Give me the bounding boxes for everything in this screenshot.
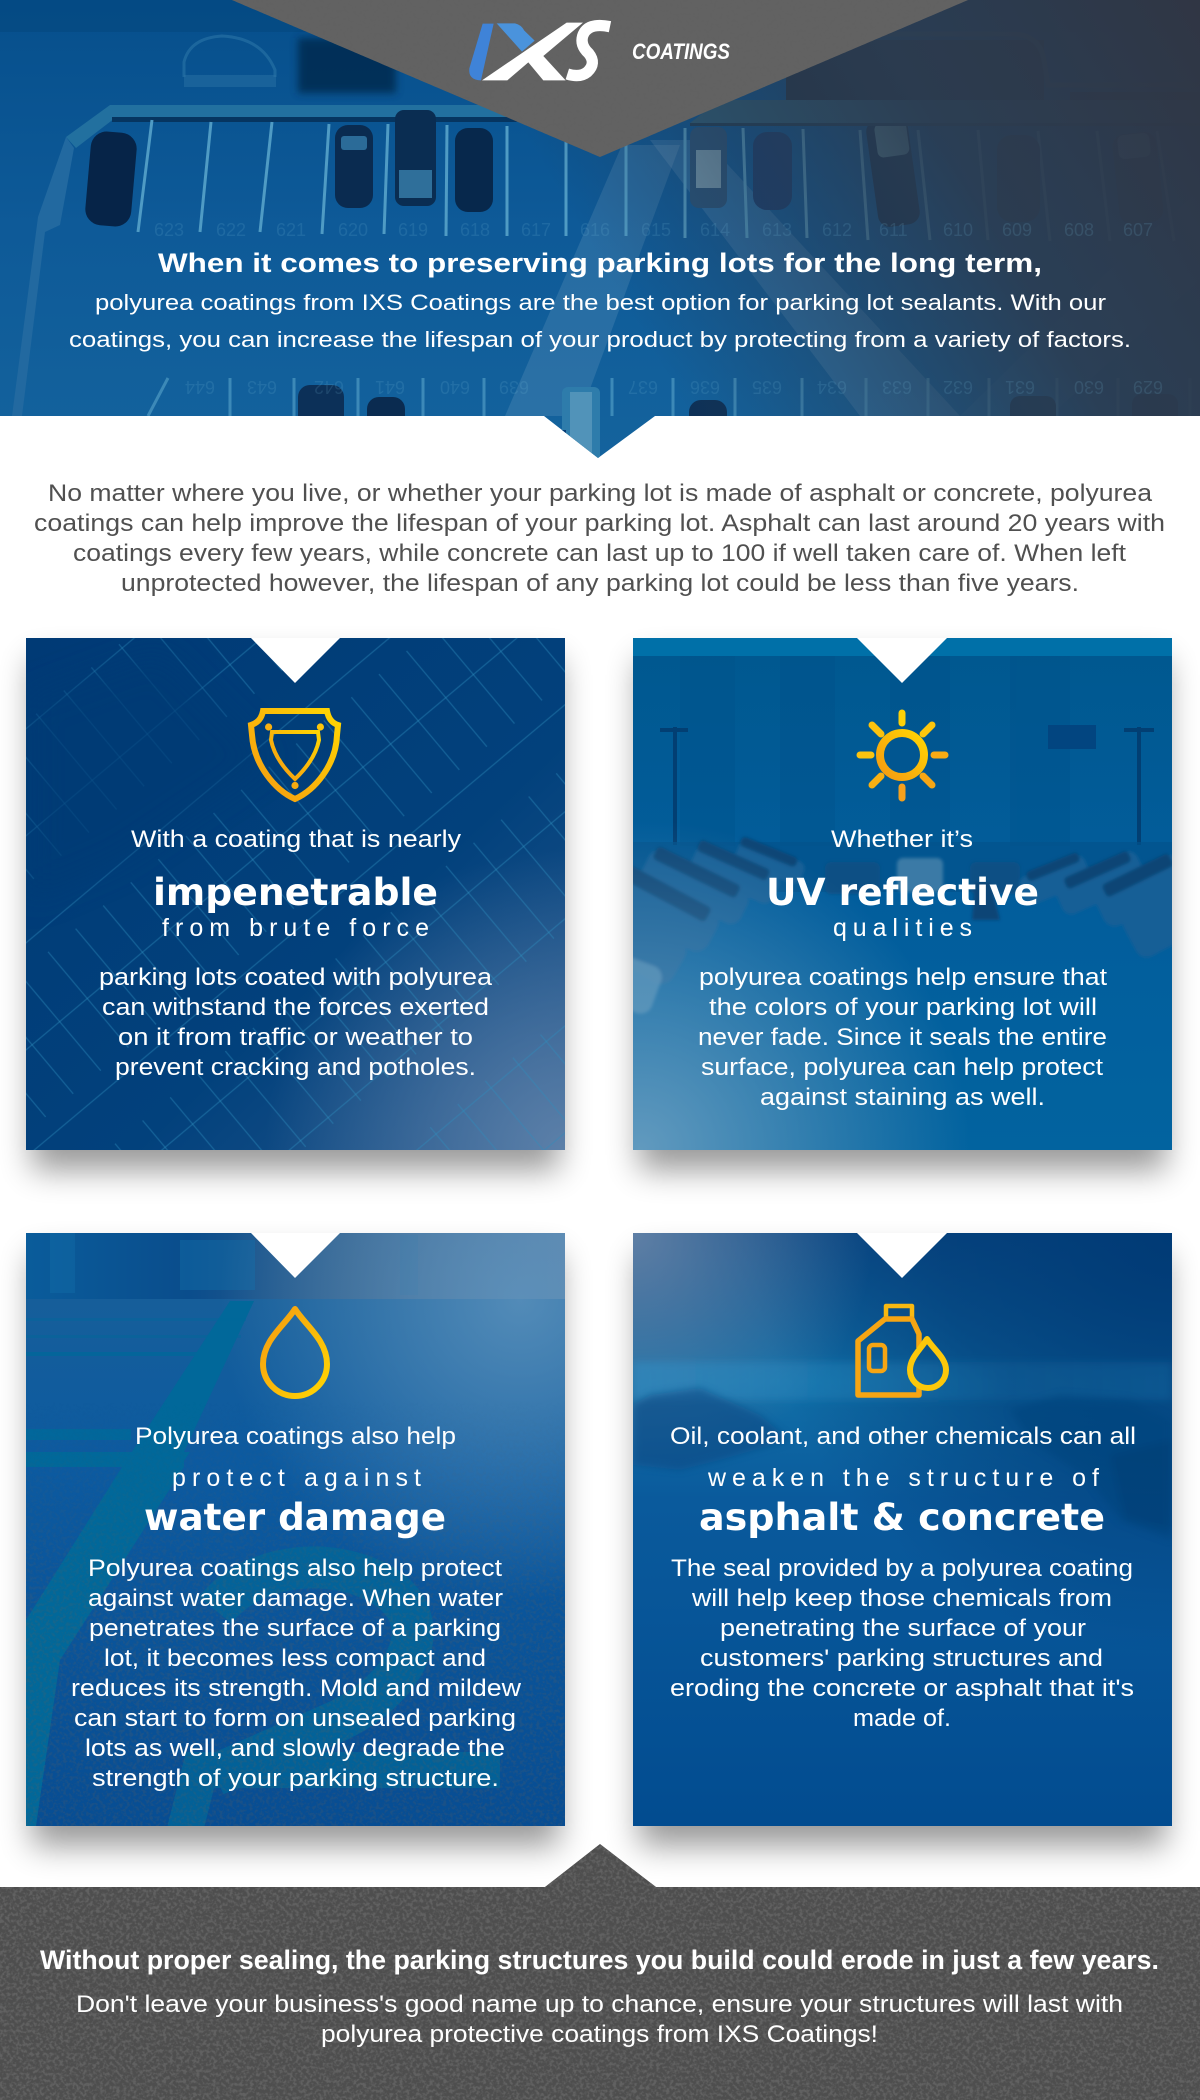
- logo wordmark: COATINGS: [632, 39, 730, 64]
- text: asphalt and concrete: asphalt & concrete: [699, 1496, 1105, 1539]
- footer text: Without proper sealing, the parking structures you build could erode in just a few years.: [40, 1945, 1159, 1975]
- text: impenetrable: from brute force: [162, 914, 429, 942]
- panel: impenetrable: [26, 638, 565, 1170]
- text: impenetrable: can withstand the forces exerted: [102, 994, 489, 1021]
- text: asphalt and concrete: Oil, coolant, and other chemicals can all: [670, 1423, 1136, 1450]
- text: impenetrable: impenetrable: [153, 871, 438, 914]
- bay numbers: 618: [460, 220, 490, 240]
- bay numbers: 617: [521, 220, 551, 240]
- bay numbers: 611: [879, 220, 908, 240]
- intro paragraph: unprotected however, the lifespan of any parking lot could be less than five years.: [121, 570, 1079, 597]
- cars middle: [825, 858, 1020, 920]
- text: water damage: penetrates the surface of a parking: [89, 1615, 501, 1642]
- bay numbers: 635: [752, 377, 782, 397]
- text: water damage: Polyurea coatings also help: [135, 1423, 456, 1450]
- panel: hero header: [0, 0, 1200, 462]
- text: impenetrable: on it from traffic or weather to: [118, 1024, 473, 1051]
- panel: footer call to action: [0, 1840, 1200, 2100]
- bay numbers: 640: [440, 377, 470, 397]
- bay numbers: 608: [1064, 220, 1094, 240]
- text: water damage: reduces its strength. Mold and mildew: [71, 1675, 522, 1702]
- icon: oil bottle and drop: [858, 1306, 946, 1395]
- panel: asphalt and concrete: [633, 1233, 1172, 1846]
- text: impenetrable: parking lots coated with polyurea: [99, 964, 493, 991]
- text: UV reflective: never fade. Since it seals the entire: [698, 1024, 1107, 1051]
- text: UV reflective: [698, 826, 1107, 1111]
- parked cars: [633, 1388, 1172, 1540]
- bay numbers: 631: [1005, 377, 1035, 397]
- text: UV reflective: against staining as well.: [760, 1084, 1045, 1111]
- text: impenetrable: prevent cracking and potholes.: [115, 1054, 476, 1081]
- asphalt header triangle: [232, 0, 968, 158]
- icon: sun: [860, 713, 945, 798]
- intro paragraph: No matter where you live, or whether your parking lot is made of asphalt or concrete, polyurea: [48, 480, 1153, 507]
- logo: IXS Coatings: [469, 23, 730, 80]
- bay numbers: 637: [628, 377, 658, 397]
- bay numbers: 641: [375, 377, 405, 397]
- text: UV reflective: polyurea coatings help ensure that: [699, 964, 1107, 991]
- hero text: coatings, you can increase the lifespan of your product by protecting from a variety of factors.: [69, 327, 1131, 352]
- text: UV reflective: qualities: [833, 914, 972, 942]
- road markings: [26, 1301, 254, 1826]
- text: UV reflective: surface, polyurea can help protect: [701, 1054, 1103, 1081]
- bay numbers: 613: [762, 220, 792, 240]
- bay numbers: 633: [882, 377, 912, 397]
- bay numbers: 644: [185, 377, 215, 397]
- bay numbers: 619: [398, 220, 428, 240]
- text: water damage: lots as well, and slowly degrade the: [85, 1735, 505, 1762]
- bay numbers: 643: [247, 377, 277, 397]
- hero text: When it comes to preserving parking lots for the long term,: [158, 248, 1042, 278]
- text: water damage: against water damage. When water: [88, 1585, 503, 1612]
- bay numbers: 623: [154, 220, 184, 240]
- icon: shield: [251, 711, 338, 799]
- bay numbers: 639: [499, 377, 529, 397]
- bay numbers: 621: [276, 220, 306, 240]
- hero text: [69, 248, 1131, 352]
- intro paragraph: [34, 480, 1165, 597]
- footer text: Don't leave your business's good name up to chance, ensure your structures will last with: [76, 1991, 1123, 2018]
- bay numbers: 615: [641, 220, 671, 240]
- bay numbers: 607: [1123, 220, 1153, 240]
- cars top row: [85, 110, 920, 227]
- text: UV reflective: the colors of your parking lot will: [709, 994, 1097, 1021]
- text: asphalt and concrete: The seal provided by a polyurea coating: [671, 1555, 1133, 1582]
- bay numbers: [154, 220, 1163, 397]
- hero photo: parking lot from above: [0, 0, 1200, 462]
- text: asphalt and concrete: weaken the structure of: [707, 1464, 1099, 1492]
- panel: UV reflective: [589, 638, 1200, 1170]
- text: asphalt and concrete: eroding the concrete or asphalt that it's: [670, 1675, 1134, 1702]
- bay numbers: 630: [1074, 377, 1104, 397]
- footer text: [40, 1945, 1159, 2048]
- footer asphalt background: [0, 1840, 1200, 2100]
- text: water damage: water damage: [144, 1496, 446, 1539]
- cars bottom row: [298, 385, 1056, 458]
- text: water damage: protect against: [172, 1464, 421, 1492]
- text: asphalt and concrete: penetrating the surface of your: [720, 1615, 1086, 1642]
- footer text: polyurea protective coatings from IXS Coatings!: [321, 2021, 878, 2048]
- text: UV reflective: UV reflective: [766, 871, 1039, 914]
- text: asphalt and concrete: will help keep those chemicals from: [691, 1585, 1112, 1612]
- text: water damage: [71, 1423, 522, 1792]
- text: asphalt and concrete: [670, 1423, 1136, 1732]
- panel: water damage: [26, 1233, 565, 1846]
- upper right building outline: [690, 42, 910, 126]
- intro paragraph: coatings every few years, while concrete can last up to 100 if well taken care of. When left: [73, 540, 1126, 567]
- text: water damage: strength of your parking structure.: [92, 1765, 499, 1792]
- bay numbers: 612: [822, 220, 852, 240]
- cars right row: [1020, 851, 1172, 958]
- text: UV reflective: Whether it’s: [831, 826, 973, 853]
- bay numbers: 622: [216, 220, 246, 240]
- text: water damage: Polyurea coatings also help protect: [88, 1555, 502, 1582]
- intro paragraph: coatings can help improve the lifespan of your parking lot. Asphalt can last around 20 years with: [34, 510, 1165, 537]
- hero text: polyurea coatings from IXS Coatings are the best option for parking lot sealants. With our: [95, 290, 1106, 315]
- bay numbers: 616: [580, 220, 610, 240]
- icon: water drop: [263, 1309, 327, 1396]
- bay numbers: 642: [314, 377, 344, 397]
- bay numbers: 620: [338, 220, 368, 240]
- text: impenetrable: With a coating that is nearly: [131, 826, 461, 853]
- bay numbers: 629: [1133, 377, 1163, 397]
- text: asphalt and concrete: customers' parking structures and: [700, 1645, 1103, 1672]
- bay numbers: 634: [817, 377, 847, 397]
- cars left row: [633, 836, 805, 1014]
- bay numbers: 614: [700, 220, 730, 240]
- text: asphalt and concrete: made of.: [853, 1705, 951, 1732]
- bay numbers: 632: [943, 377, 973, 397]
- text: water damage: lot, it becomes less compact and: [104, 1645, 486, 1672]
- bay numbers: 610: [943, 220, 973, 240]
- bay numbers: 636: [690, 377, 720, 397]
- text: impenetrable: [99, 826, 493, 1081]
- bay numbers: 609: [1002, 220, 1032, 240]
- text: water damage: can start to form on unsealed parking: [74, 1705, 516, 1732]
- logo mark: [469, 23, 610, 80]
